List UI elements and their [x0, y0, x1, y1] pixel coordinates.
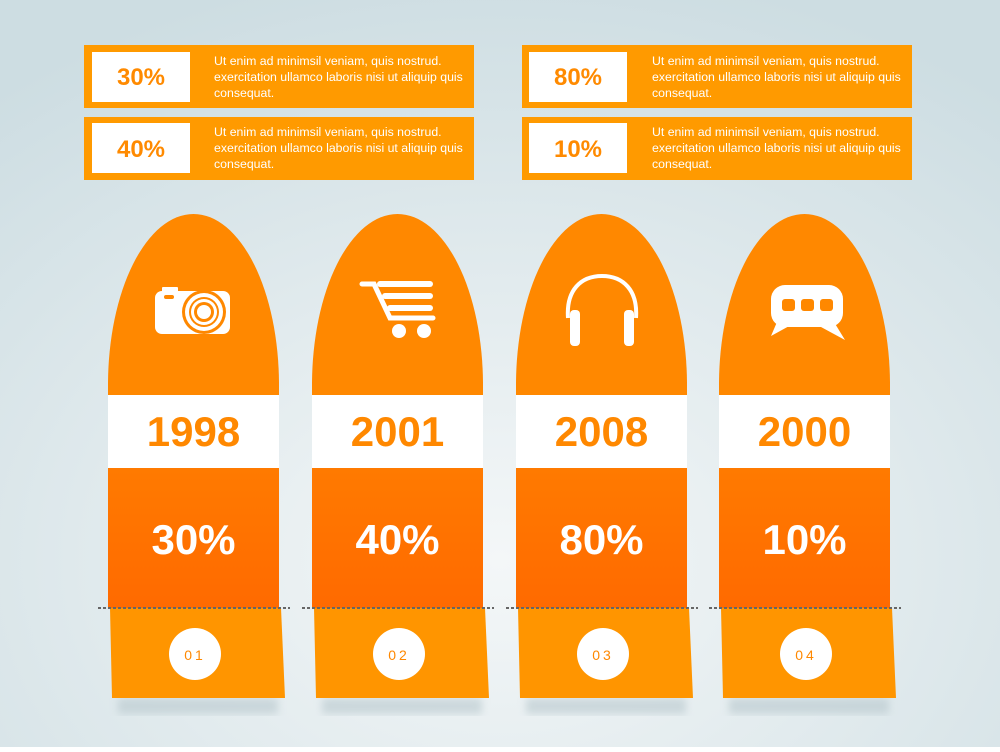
column 2: [302, 214, 494, 714]
info box 4: consequat.: [652, 157, 712, 171]
info box 3: 80%: [554, 64, 602, 91]
info box 4: exercitation ullamco laboris nisi ut aliquip quis: [652, 141, 901, 155]
column 2: 02: [388, 647, 410, 663]
column 1: 30%: [151, 516, 236, 563]
column 4: 10%: [762, 516, 847, 563]
info box 2: consequat.: [214, 157, 274, 171]
column 3: 2008: [555, 408, 648, 455]
info box 2: exercitation ullamco laboris nisi ut aliquip quis: [214, 141, 463, 155]
info box 3: exercitation ullamco laboris nisi ut aliquip quis: [652, 70, 901, 84]
column 4: [709, 214, 901, 714]
column 1: [98, 214, 290, 714]
icon: camera: [155, 287, 230, 334]
info box 3: consequat.: [652, 86, 712, 100]
info box 4: 10%: [554, 136, 602, 163]
info box 1: [84, 45, 474, 108]
info box 2: 40%: [117, 136, 165, 163]
column 3: 80%: [559, 516, 644, 563]
column 2: 40%: [355, 516, 440, 563]
column 1: 01: [184, 647, 206, 663]
info box 1: 30%: [117, 64, 165, 91]
info box 2: Ut enim ad minimsil veniam, quis nostrud.: [214, 125, 442, 139]
icon: cart: [362, 281, 433, 338]
info box 2: [84, 117, 474, 180]
info box 1: consequat.: [214, 86, 274, 100]
column 4: 04: [795, 647, 817, 663]
column 2: 2001: [351, 408, 444, 455]
info box 3: Ut enim ad minimsil veniam, quis nostrud.: [652, 54, 880, 68]
info box 3: [522, 45, 912, 108]
column 3: [506, 214, 698, 714]
column 4: 2000: [758, 408, 851, 455]
info box 4: Ut enim ad minimsil veniam, quis nostrud.: [652, 125, 880, 139]
icon: headphones: [568, 276, 636, 346]
column 3: 03: [592, 647, 614, 663]
column 1: 1998: [147, 408, 240, 455]
icon: chat bubble: [771, 285, 845, 340]
info box 1: Ut enim ad minimsil veniam, quis nostrud.: [214, 54, 442, 68]
info box 1: exercitation ullamco laboris nisi ut aliquip quis: [214, 70, 463, 84]
info box 4: [522, 117, 912, 180]
